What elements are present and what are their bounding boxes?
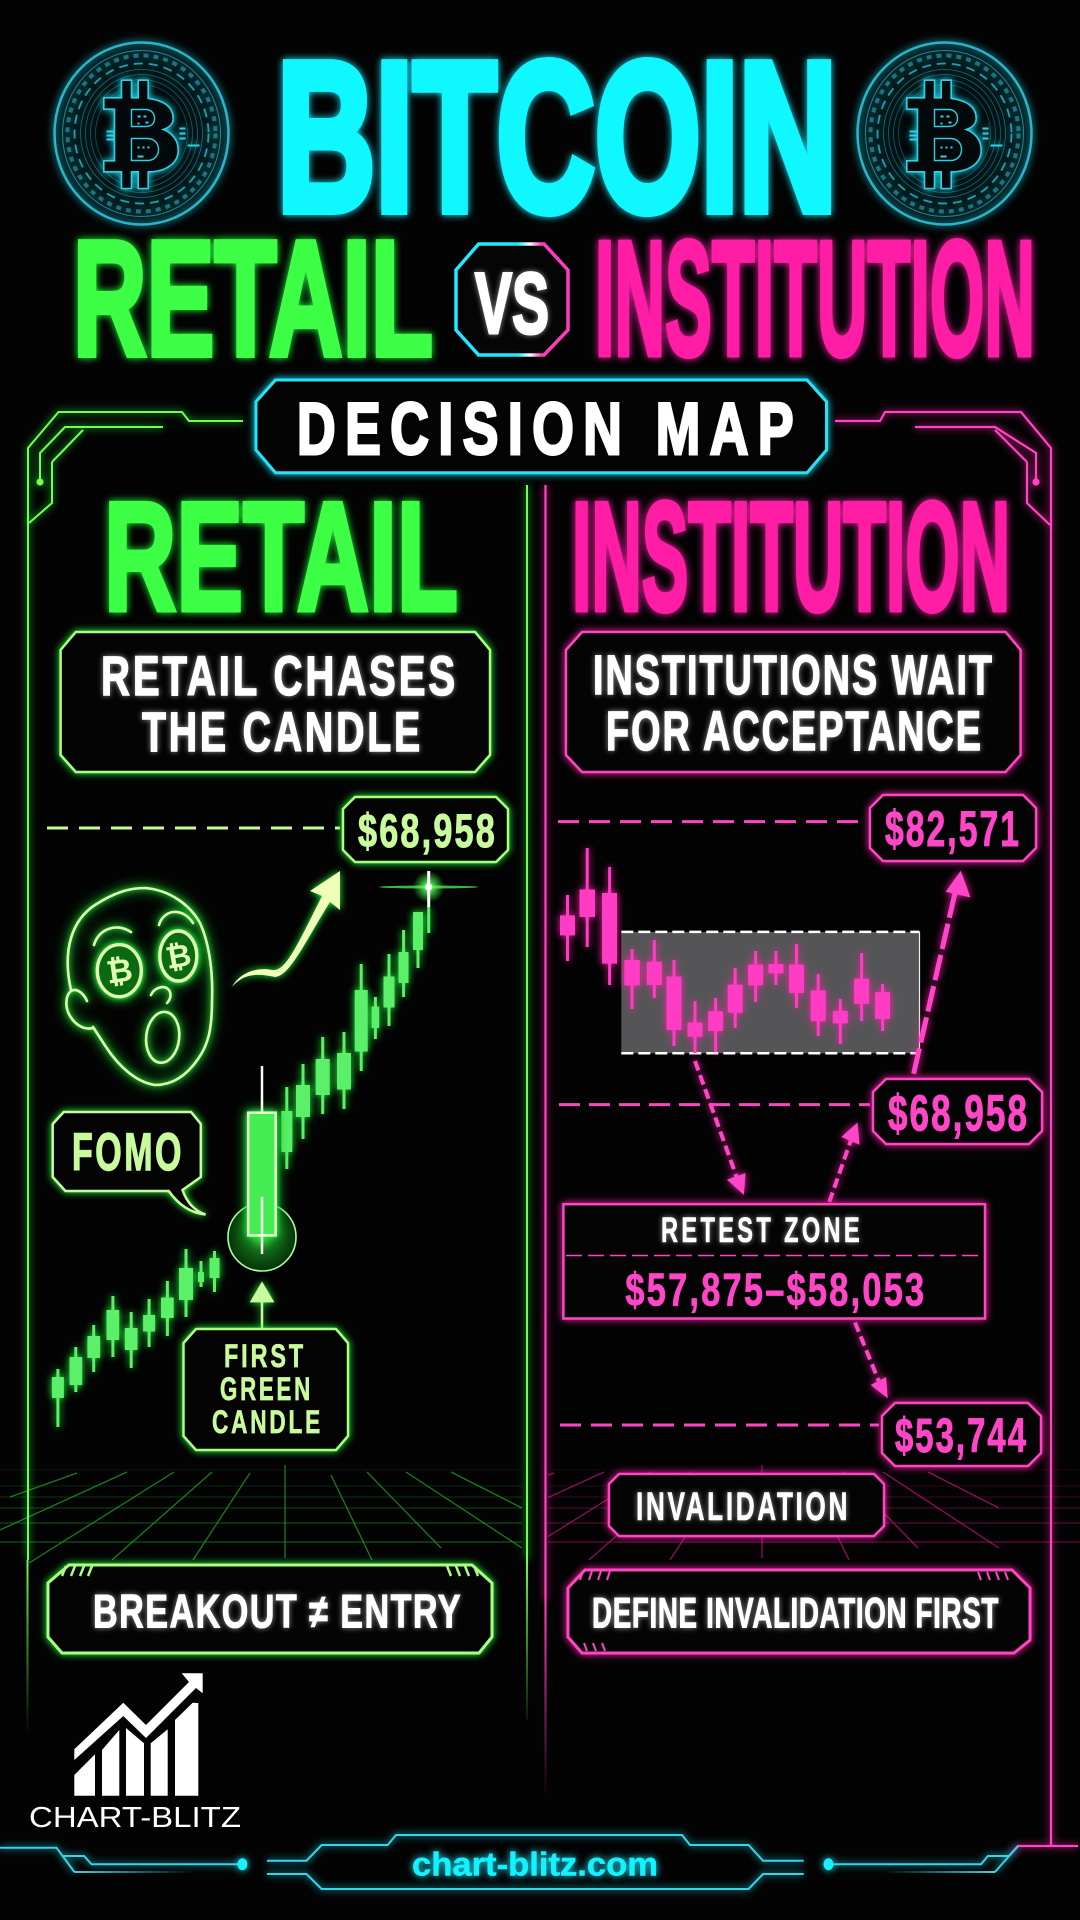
- acceptance range zone: [621, 932, 920, 1053]
- frame: retail top-left circuit: [28, 412, 243, 1560]
- retail price tag: $68,958: [358, 804, 497, 857]
- icon: bitcoin coin left: [54, 42, 228, 224]
- retest zone panel: [563, 1204, 985, 1318]
- footer right trace fade: [885, 1871, 995, 1873]
- invalidation label: [609, 1474, 884, 1536]
- callout: first green candle: GREEN: [220, 1371, 313, 1407]
- footer left trace fade: [74, 1871, 193, 1873]
- FOMO speech bubble: FOMO: [72, 1123, 184, 1182]
- FOMO speech bubble: [53, 1112, 206, 1214]
- first green candle with highlight: [228, 1066, 296, 1271]
- retail candlestick chart: [52, 907, 429, 1427]
- callout: first green candle: CANDLE: [212, 1404, 323, 1440]
- arrow: fomo up: [232, 871, 340, 987]
- frame: retail left rail fade: [26, 1560, 28, 1735]
- arrow: pointing to first candle: [250, 1281, 274, 1329]
- frame: institution center rail fade: [544, 1600, 547, 1795]
- callout: retail chases the candle: [61, 632, 490, 772]
- callout: retail chases the candle: RETAIL CHASES: [101, 644, 458, 707]
- perspective grid floor: institution: [548, 1465, 1080, 1560]
- icon: left bitcoin eye: [97, 945, 141, 997]
- price tag: 68,958: [873, 1079, 1042, 1144]
- retest zone panel: RETEST ZONE: [661, 1211, 863, 1250]
- footer circuit and URL plate: [0, 1835, 1018, 1889]
- icon: shocked face: [66, 888, 212, 1085]
- institution price line 82,571: [558, 820, 867, 823]
- retail price tag: [343, 797, 508, 862]
- callout: first green candle: FIRST: [224, 1338, 306, 1374]
- frame: institution center rail: [544, 485, 547, 1600]
- rule: breakout is not entry: BREAKOUT ≠ ENTRY: [93, 1584, 462, 1638]
- invalidation label: INVALIDATION: [636, 1485, 850, 1529]
- perspective grid floor: retail: [0, 1465, 522, 1564]
- arrow: down to retest zone: [695, 1061, 746, 1195]
- institution candlestick chart: [560, 848, 890, 1053]
- frame: retail center rail fade: [526, 1560, 528, 1720]
- icon: right bitcoin eye: [160, 931, 197, 981]
- footer URL: chart-blitz.com: [412, 1846, 658, 1882]
- peak candle spark: [379, 871, 479, 907]
- icon: bitcoin coin right: [858, 42, 1032, 224]
- arrow: up to 82,571: [914, 871, 970, 1074]
- frame: institution right rail and circuit: [835, 412, 1078, 1856]
- icon: left bitcoin eye: ₿: [104, 950, 135, 992]
- callout: first green candle: [184, 1329, 348, 1450]
- retest zone panel: $57,875–$58,053: [625, 1264, 926, 1316]
- logo mark: [74, 1673, 203, 1796]
- callout: retail chases the candle: THE CANDLE: [142, 700, 423, 763]
- institution price line 53,744: [560, 1424, 879, 1426]
- heading: RETAIL: RETAIL: [73, 207, 433, 390]
- retail price line: [47, 826, 340, 830]
- DECISION MAP banner: DECISION MAP: [297, 389, 803, 470]
- DECISION MAP banner: [256, 380, 826, 473]
- institution price line 68,958: [559, 1103, 870, 1106]
- price tag: 82,571: [870, 795, 1036, 861]
- rule: breakout is not entry: [48, 1565, 492, 1653]
- VS badge: [456, 244, 568, 355]
- arrow: retest up to 68,958: [829, 1122, 860, 1202]
- price tag: 53,744: [882, 1403, 1041, 1466]
- arrow: down to 53,744: [855, 1322, 888, 1398]
- icon: right bitcoin eye: ₿: [163, 937, 194, 977]
- frame: retail center rail: [526, 485, 528, 1560]
- logo text: CHART-BLITZ: [29, 1802, 241, 1834]
- callout: institutions wait for acceptance: [566, 632, 1021, 772]
- panel heading: RETAIL: RETAIL: [104, 470, 458, 643]
- VS badge: VS: [475, 256, 549, 352]
- rule: define invalidation first: [568, 1570, 1030, 1653]
